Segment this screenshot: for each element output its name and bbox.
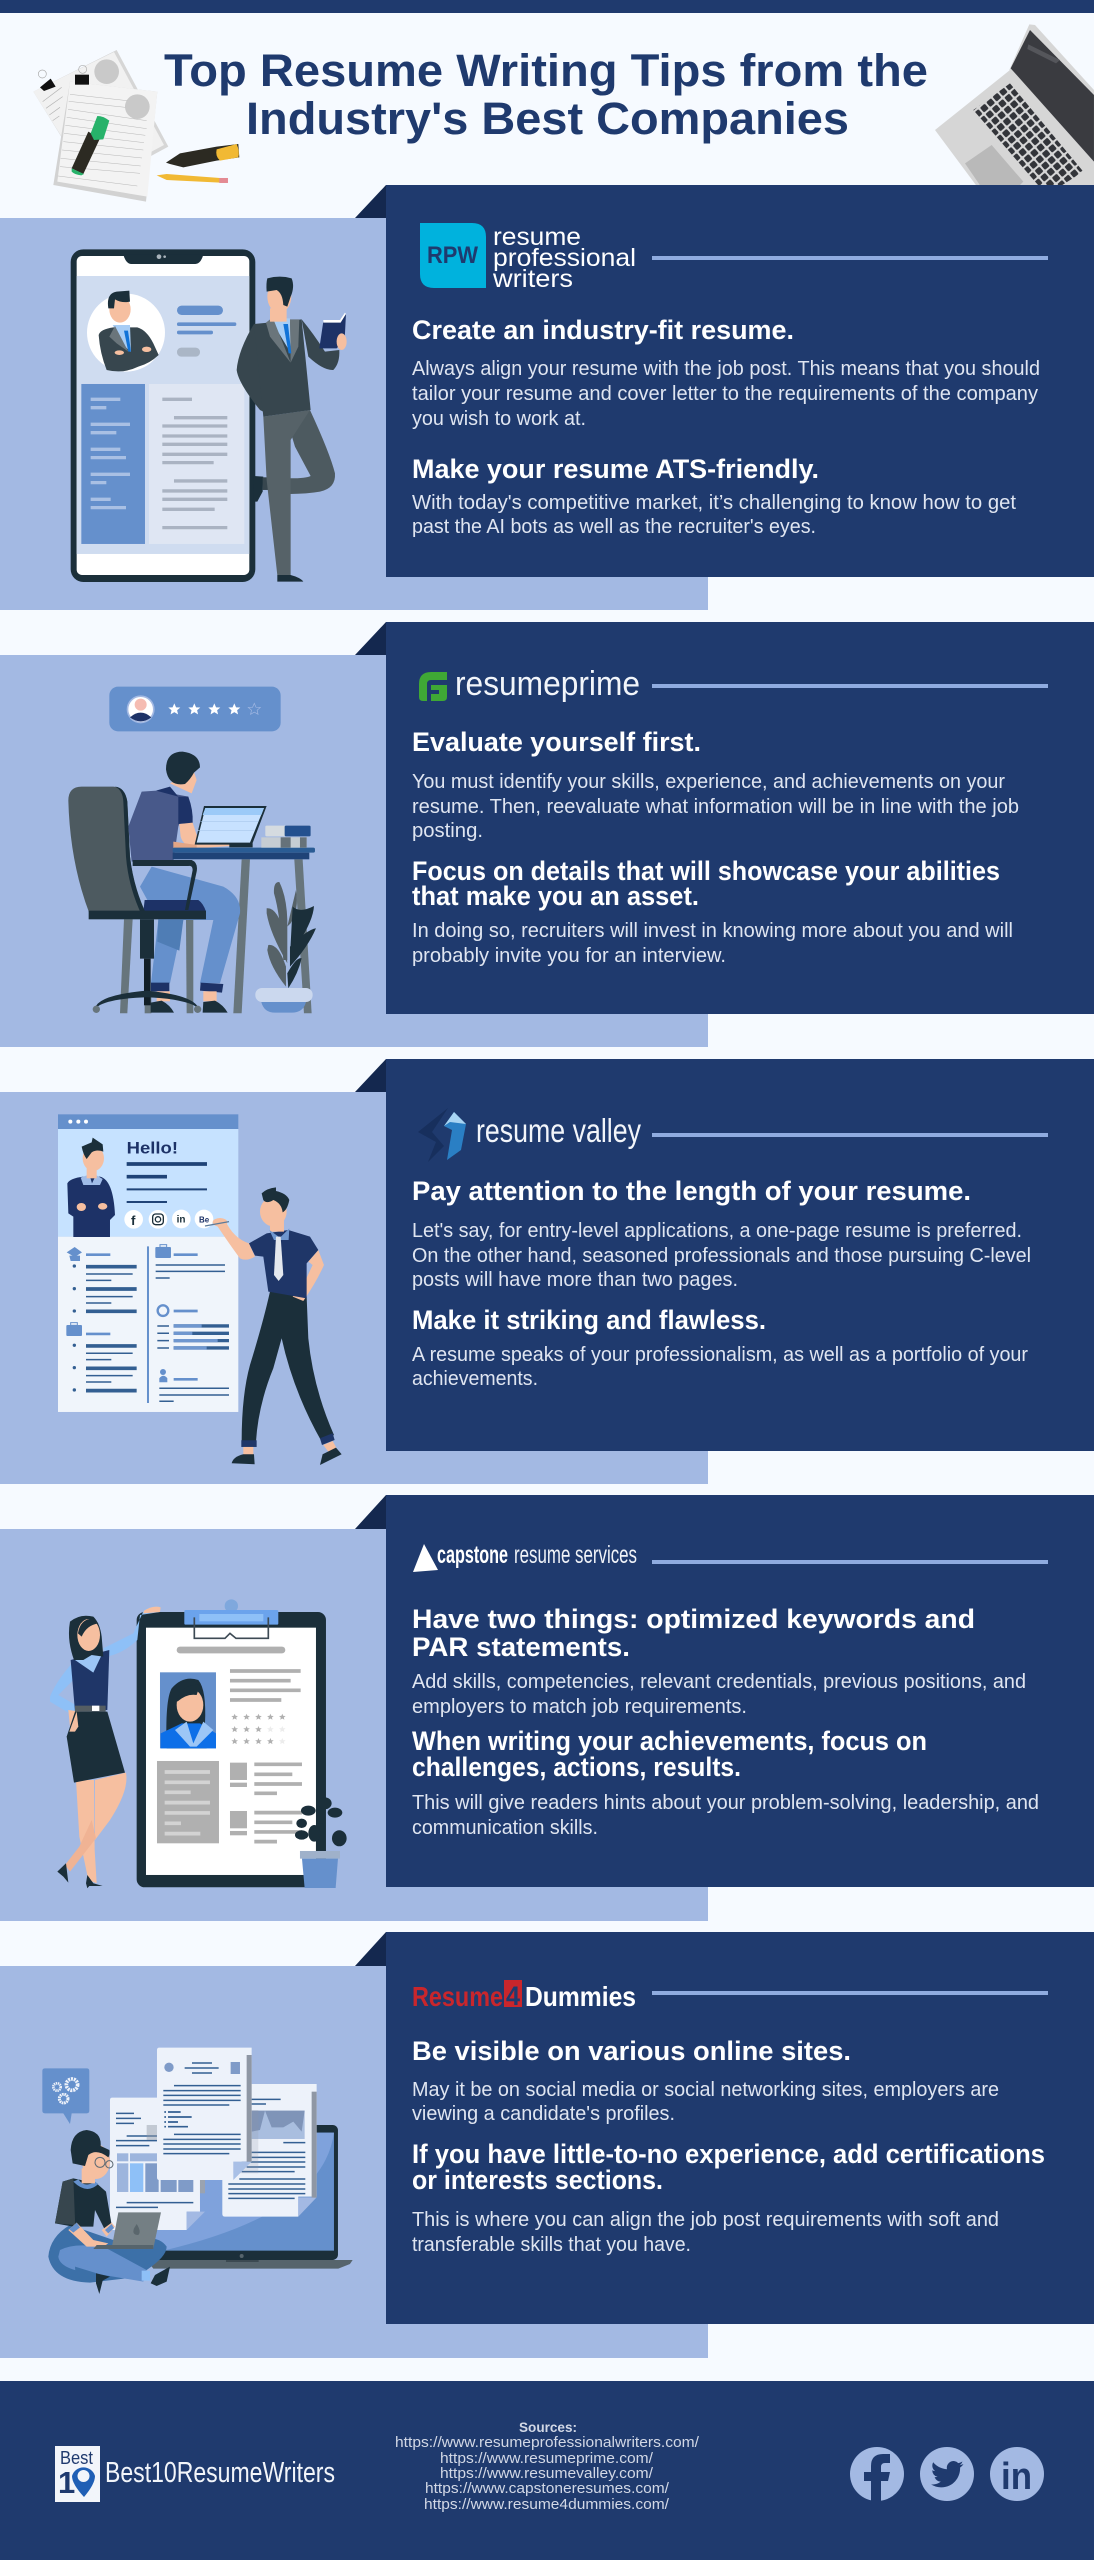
text block: tip 2: With today's competitive market, it’s challenging to know how to get xyxy=(412,491,1016,514)
text block: tip 2: In doing so, recruiters will invest in knowing more about you and will xyxy=(412,919,1013,942)
icon: papers, marker and pencil xyxy=(33,50,239,202)
text block: tip 1: Evaluate yourself first. xyxy=(412,727,701,757)
text block: tip 1: Be visible on various online sites. xyxy=(412,2036,851,2066)
text block: tip 2 xyxy=(412,1305,1028,1390)
text block: tip 2: that make you an asset. xyxy=(412,881,699,911)
illustration: man presenting online resume xyxy=(58,1114,342,1465)
text block: tip 2: probably invite you for an interview. xyxy=(412,944,726,967)
text block: tip 2: past the AI bots as well as the recruiter's eyes. xyxy=(412,515,816,538)
logo: resume professional writers: writers xyxy=(492,265,573,293)
text block: tip 2 xyxy=(412,454,1016,538)
text block: tip 1 xyxy=(412,2036,999,2125)
panel: section 1 resume professional writers xyxy=(0,185,1094,610)
text block: tip 1: posting. xyxy=(412,819,483,842)
illustration: man beside phone resume xyxy=(71,249,347,582)
icon: linkedin: in xyxy=(1001,2456,1032,2498)
text block: tip 1: tailor your resume and cover letter to the requirements of the company xyxy=(412,382,1039,405)
illustration: man presenting online resume: Be xyxy=(199,1215,210,1224)
sources list: https://www.resumeprime.com/ xyxy=(440,2450,654,2467)
text block: tip 1: On the other hand, seasoned professionals and those pursuing C-level xyxy=(412,1244,1031,1267)
text block: tip 1: Let's say, for entry-level applications, a one-page resume is preferred. xyxy=(412,1219,1022,1242)
panel: section 5 resume4dummies xyxy=(0,1932,1094,2358)
text block: tip 2: Focus on details that will showcase your abilities xyxy=(412,856,1000,886)
sources list: https://www.resumevalley.com/ xyxy=(440,2465,654,2482)
footer xyxy=(0,2381,1094,2560)
text block: tip 2 xyxy=(412,1726,1039,1839)
logo: resume4dummies: Resume xyxy=(412,1981,503,2012)
illustration: woman beside clipboard resume xyxy=(50,1599,347,1888)
logo: best10resumewriters: 1 xyxy=(58,2465,75,2500)
logo: resume4dummies xyxy=(412,1980,636,2012)
logo: resume4dummies: Dummies xyxy=(525,1981,636,2012)
logo: best10resumewriters xyxy=(55,2446,335,2502)
text block: tip 1 xyxy=(412,727,1019,842)
text block: tip 1 xyxy=(412,1176,1031,1291)
logo: resume professional writers: resume xyxy=(493,223,581,251)
sources list xyxy=(395,2419,700,2513)
text block: tip 1: resume. Then, reevaluate what information will be in line with the job xyxy=(412,795,1019,818)
sources list: https://www.resumeprofessionalwriters.com/ xyxy=(395,2434,700,2451)
text block: tip 2: This will give readers hints about your problem-solving, leadership, and xyxy=(412,1791,1039,1814)
text block: tip 1: Have two things: optimized keywords and xyxy=(412,1604,975,1634)
sources list: https://www.capstoneresumes.com/ xyxy=(425,2480,670,2497)
text block: tip 2: Make it striking and flawless. xyxy=(412,1305,766,1335)
panel: section 4 capstone resume services xyxy=(0,1495,1094,1921)
text block: tip 2: A resume speaks of your professionalism, as well as a portfolio of your xyxy=(412,1343,1028,1366)
illustration: man presenting online resume: Hello! xyxy=(127,1139,178,1158)
text block: tip 2: or interests sections. xyxy=(412,2165,663,2195)
text block: tip 1: viewing a candidate's profiles. xyxy=(412,2102,675,2125)
text block: tip 1: you wish to work at. xyxy=(412,407,586,430)
text block: tip 1 xyxy=(412,1604,1026,1718)
text block: tip 1: May it be on social media or social networking sites, employers are xyxy=(412,2078,999,2101)
icon: facebook xyxy=(850,2447,904,2501)
text block: tip 2 xyxy=(412,856,1013,967)
text block: tip 2: transferable skills that you have. xyxy=(412,2233,691,2256)
text block: tip 2: This is where you can align the job post requirements with soft and xyxy=(412,2208,999,2231)
title: Industry's Best Companies xyxy=(246,93,849,144)
title xyxy=(164,45,928,144)
panel: section 2 resumeprime xyxy=(0,622,1094,1047)
icon: laptop from above xyxy=(935,24,1094,195)
illustration: man presenting online resume: in xyxy=(177,1214,186,1225)
logo: resume4dummies: 4 xyxy=(506,1981,520,2011)
logo: capstone resume services: resume services xyxy=(514,1541,637,1569)
logo: best10resumewriters: Best10ResumeWriters xyxy=(105,2457,335,2489)
text block: tip 2: If you have little-to-no experience, add certifications xyxy=(412,2139,1045,2169)
logo: resumeprime: resumeprime xyxy=(455,665,640,703)
text block: tip 1: employers to match job requirements. xyxy=(412,1695,747,1718)
illustration: man working at desk with rating xyxy=(68,687,316,1013)
icon: linkedin xyxy=(990,2447,1044,2501)
illustration: man presenting online resume: f xyxy=(131,1213,136,1228)
logo: resume professional writers: RPW xyxy=(427,242,478,269)
sources list: https://www.resume4dummies.com/ xyxy=(424,2496,670,2513)
logo: capstone resume services: capstone xyxy=(437,1541,508,1569)
text block: tip 2: When writing your achievements, focus on xyxy=(412,1726,927,1756)
logo: resume valley: resume valley xyxy=(476,1112,641,1149)
logo: resume professional writers xyxy=(420,223,636,293)
text block: tip 2: achievements. xyxy=(412,1367,538,1390)
sources list: Sources: xyxy=(519,2419,577,2435)
text block: tip 1: Create an industry-fit resume. xyxy=(412,315,794,345)
panel: section 3 resume valley xyxy=(0,1059,1094,1484)
text block: tip 1: posts will have more than two pages. xyxy=(412,1268,738,1291)
text block: tip 1: Add skills, competencies, relevant credentials, previous positions, and xyxy=(412,1670,1026,1693)
text block: tip 1: Always align your resume with the job post. This means that you should xyxy=(412,357,1040,380)
text block: tip 2: communication skills. xyxy=(412,1816,598,1839)
text block: tip 2: Make your resume ATS-friendly. xyxy=(412,454,819,484)
text block: tip 1: You must identify your skills, experience, and achievements on your xyxy=(412,770,1005,793)
text block: tip 2: challenges, actions, results. xyxy=(412,1752,741,1782)
illustration: woman with laptop and documents xyxy=(42,2048,353,2294)
title: Top Resume Writing Tips from the xyxy=(164,45,928,96)
logo: resume professional writers: professional xyxy=(493,244,636,272)
icon: twitter xyxy=(920,2447,974,2501)
logo: best10resumewriters: Best xyxy=(60,2448,93,2468)
text block: tip 2 xyxy=(412,2139,1045,2256)
text block: tip 1: PAR statements. xyxy=(412,1632,630,1662)
top bar xyxy=(0,0,1094,13)
logo: capstone resume services xyxy=(413,1541,637,1572)
text block: tip 1 xyxy=(412,315,1040,430)
logo: resume valley xyxy=(418,1108,641,1162)
text block: tip 1: Pay attention to the length of your resume. xyxy=(412,1176,971,1206)
